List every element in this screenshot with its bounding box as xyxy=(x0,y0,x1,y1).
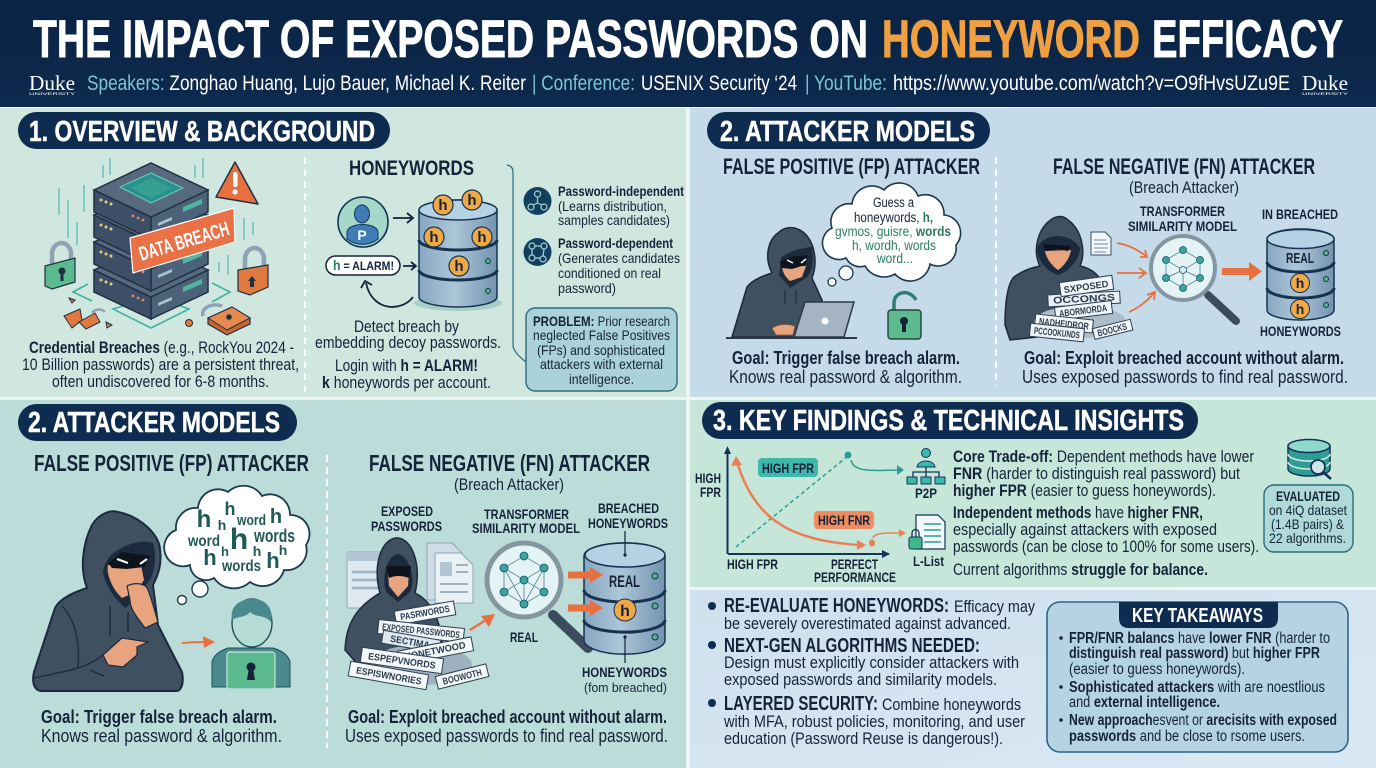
heading pill: attacker models: 2. ATTACKER MODELS xyxy=(28,407,280,439)
diagram: honeywords database: h xyxy=(454,258,464,275)
arrow: alarm to database xyxy=(403,262,416,270)
icon: user with locked account xyxy=(212,599,290,689)
chart: FPR FNR trade-off: FPR xyxy=(700,484,721,500)
heading: FP attacker: FALSE POSITIVE (FP) ATTACKER xyxy=(34,450,309,476)
thought cloud: guesses: Guess a xyxy=(873,195,914,210)
callout: key takeaways: New approachesvent or arecisits with exposed xyxy=(1069,712,1337,729)
database: breached honeywords: REAL xyxy=(609,572,640,591)
recommendation: re-evaluate: RE-EVALUATE HONEYWORDS: xyxy=(724,595,949,617)
recommendation: re-evaluate: be severely overestimated against advanced. xyxy=(724,614,1011,633)
icon: magnifier with network xyxy=(487,543,588,648)
thought cloud: honeywords: h xyxy=(218,517,226,533)
callout: problem: intelligence. xyxy=(569,371,634,387)
database: real and honeywords: h xyxy=(1296,275,1304,291)
panel: attacker models bottom left xyxy=(0,400,686,768)
recommendation: layered security: LAYERED SECURITY: xyxy=(724,693,878,715)
recommendation: next-gen algorithms: NEXT-GEN ALGORITHMS NEEDED: xyxy=(724,635,980,657)
callout: evaluated: EVALUATED xyxy=(1276,488,1340,504)
password papers: ESPEPVNORDS xyxy=(367,651,436,672)
chart: FPR FNR trade-off: HIGH FNR xyxy=(818,512,870,528)
speakers and links line: | Conference: xyxy=(532,71,635,95)
heading pill: attacker models: 2. ATTACKER MODELS xyxy=(720,116,975,148)
password papers: PASRWORDS xyxy=(400,604,451,623)
text: core trade-off xyxy=(953,447,1254,500)
diagram: honeywords database: h xyxy=(477,229,487,246)
banner: data breach: DATA BREACH xyxy=(137,218,232,266)
icon: magnifier with network xyxy=(1151,236,1236,321)
labels: transformer similarity model: SIMILARITY MODEL xyxy=(472,520,580,536)
database: breached honeywords xyxy=(584,531,665,663)
illustration: breach attacker with exposed passwords xyxy=(1005,216,1133,342)
banner: data breach xyxy=(130,208,235,273)
logo: Duke right: Duke xyxy=(1302,71,1348,95)
item: password-dependent xyxy=(524,235,680,296)
item: password-independent: (Learns distribution, xyxy=(558,198,667,214)
thought cloud: honeywords xyxy=(164,486,310,604)
thought cloud: guesses: honeywords, h, xyxy=(854,210,933,225)
icon: green lock xyxy=(45,243,75,289)
heading: honeywords: HONEYWORDS xyxy=(349,157,474,180)
caption: credential breaches: 10 Billion passwords) are a persistent threat, xyxy=(22,356,299,374)
item: password-independent xyxy=(524,183,684,228)
caption: honeywords: k honeywords per account. xyxy=(322,374,491,392)
text: struggle for balance: Current algorithms struggle for balance. xyxy=(953,560,1208,579)
goal text: FN attacker xyxy=(1022,348,1348,387)
arrow: user to database xyxy=(393,213,413,223)
browser window xyxy=(347,552,387,608)
goal text: FP attacker xyxy=(729,348,962,387)
speakers and links line: Speakers: Zonghao Huang, Lujo Bauer, Michael K. Reiter xyxy=(87,71,526,95)
icon: open green lock xyxy=(888,293,921,339)
exposed password papers: SXPOSED xyxy=(1063,279,1109,296)
heading: FN attacker: (Breach Attacker) xyxy=(454,476,564,494)
icon: P2P hierarchy xyxy=(907,448,945,501)
callout: key takeaways: distinguish real password) but higher FPR xyxy=(1069,645,1320,662)
takeaways header tab xyxy=(1119,602,1278,628)
heading: FN attacker: (Breach Attacker) xyxy=(1129,179,1239,197)
icon: orange lock xyxy=(238,248,268,295)
goal text: FP attacker: Goal: Trigger false breach alarm. xyxy=(732,348,960,368)
labels: transformer similarity model: SIMILARITY MODEL xyxy=(1128,218,1237,234)
speakers and links line: https://www.youtube.com/watch?v=O9fHvsUZu9E xyxy=(893,71,1290,95)
document with profile xyxy=(427,543,473,603)
thought cloud: honeywords: words xyxy=(221,558,261,575)
callout: key takeaways: Sophisticated attackers with are noestlious xyxy=(1069,679,1325,696)
icon: database search xyxy=(1288,440,1331,479)
callout: problem: (FPs) and sophisticated xyxy=(537,342,665,358)
arrow: loop back xyxy=(361,281,413,307)
honeyword coins xyxy=(424,190,492,276)
arrow: hacker to user xyxy=(182,636,215,648)
thought cloud: guesses xyxy=(822,183,961,286)
label: honeywords from breached: (fom breached) xyxy=(584,680,667,695)
title: HONEYWORD xyxy=(882,10,1140,69)
labels: transformer similarity model xyxy=(1128,203,1237,234)
caption: honeywords: Detect breach by xyxy=(354,318,460,336)
alarm pill: h = ALARM! xyxy=(333,257,394,273)
recommendation: layered security: education (Password Reuse is dangerous!). xyxy=(724,729,1003,748)
laptop xyxy=(794,302,854,337)
illustration: thinking hacker xyxy=(33,511,183,691)
exposed password papers: OCCONGS xyxy=(1053,292,1115,307)
caption: honeywords xyxy=(315,318,501,392)
diagram: honeywords database: h xyxy=(438,197,448,214)
icon: broken lock pieces xyxy=(64,298,192,329)
labels: transformer similarity model: TRANSFORMER xyxy=(484,506,569,522)
thought cloud: honeywords: word xyxy=(187,533,220,550)
label: real: REAL xyxy=(510,629,538,645)
caption: credential breaches xyxy=(22,339,299,391)
thought cloud: honeywords: h xyxy=(279,542,287,558)
text: independent methods: passwords (can be close to 100% for some users). xyxy=(953,537,1259,556)
goal text: FP attacker xyxy=(41,707,282,746)
thought cloud: honeywords: h xyxy=(197,506,211,533)
database: real and honeywords: REAL xyxy=(1286,250,1314,267)
thought cloud: guesses: word... xyxy=(876,251,913,266)
database: breached honeywords: h xyxy=(620,603,630,620)
takeaways header tab: KEY TAKEAWAYS xyxy=(1132,605,1263,627)
panel: recommendations and takeaways xyxy=(690,590,1376,768)
caption: credential breaches: Credential Breaches (e.g., RockYou 2024 - xyxy=(29,339,294,357)
heading: FN attacker: FALSE NEGATIVE (FN) ATTACKER xyxy=(369,450,650,476)
thought cloud: guesses: h, wordh, words xyxy=(852,238,936,253)
database: real and honeywords xyxy=(1267,229,1334,320)
password papers: EXPOSED PASSWORDS xyxy=(382,622,460,641)
illustration: hacker at laptop xyxy=(726,228,857,338)
label: honeywords from breached: HONEYWORDS xyxy=(582,664,667,680)
panel: overview and background xyxy=(0,108,686,397)
callout: problem: attackers with external xyxy=(540,356,663,372)
text: independent methods: Independent methods have higher FNR, xyxy=(953,503,1203,522)
item: password-dependent: Password-dependent xyxy=(558,235,673,251)
chart: FPR FNR trade-off xyxy=(695,446,906,585)
heading: FN attacker xyxy=(369,450,650,494)
illustration: data breach server xyxy=(45,158,268,335)
labels: exposed passwords: EXPOSED xyxy=(381,503,433,519)
recommendation: next-gen algorithms xyxy=(708,635,1019,689)
speakers and links line: USENIX Security ‘24 xyxy=(641,71,797,95)
password papers: BOOWOTH xyxy=(442,667,483,688)
label: in breached: IN BREACHED xyxy=(1262,206,1338,222)
chart: FPR FNR trade-off: HIGH FPR xyxy=(762,460,814,476)
goal text: FN attacker xyxy=(345,707,668,746)
thought cloud: honeywords: h xyxy=(270,506,282,528)
recommendation: layered security: with MFA, robust policies, monitoring, and user xyxy=(723,712,1025,731)
speakers and links line xyxy=(87,71,1290,95)
goal text: FP attacker: Knows real password & algorithm. xyxy=(729,367,962,387)
icon: broken orange lock xyxy=(203,305,250,335)
arrow: to honeyword xyxy=(568,600,603,616)
password papers xyxy=(348,601,489,690)
thought cloud: honeywords: h xyxy=(203,545,217,570)
callout: problem: neglected False Positives xyxy=(533,327,670,343)
callout: key takeaways xyxy=(1047,602,1348,752)
heading: FP attacker: FALSE POSITIVE (FP) ATTACKER xyxy=(723,154,980,179)
text: core trade-off: higher FPR (easier to guess honeywords). xyxy=(953,481,1216,500)
recommendation: next-gen algorithms: Design must explicitly consider attackers with xyxy=(724,653,1019,672)
thought cloud: honeywords: h xyxy=(266,548,280,573)
password papers: ESPISWNORIES xyxy=(355,665,422,688)
heading pill: key findings: 3. KEY FINDINGS & TECHNICAL INSIGHTS xyxy=(713,405,1184,437)
labels: breached honeywords: BREACHED xyxy=(598,500,659,516)
callout: evaluated: (1.4B pairs) & xyxy=(1271,516,1345,532)
labels: breached honeywords: HONEYWORDS xyxy=(588,515,668,531)
thought cloud: honeywords: h xyxy=(253,543,261,559)
recommendation: next-gen algorithms: exposed passwords and similarity models. xyxy=(724,670,997,689)
labels: transformer similarity model: TRANSFORMER xyxy=(1140,203,1225,219)
text: core trade-off: Core Trade-off: Dependent methods have lower xyxy=(953,447,1254,466)
icon: L-List document: L-List xyxy=(913,553,944,569)
item: password-independent: samples candidates) xyxy=(558,212,670,228)
callout: evaluated xyxy=(1264,485,1353,552)
goal text: FP attacker: Goal: Trigger false breach alarm. xyxy=(41,707,277,727)
chart: FPR FNR trade-off: PERFORMANCE xyxy=(814,569,896,585)
icon: user with password: P xyxy=(357,227,367,243)
item: password-independent: Password-independent xyxy=(558,183,684,199)
item: password-dependent: (Generates candidates xyxy=(558,250,680,266)
arrow: model to database xyxy=(1222,262,1262,281)
database: real and honeywords: h xyxy=(1296,301,1304,317)
callout: problem xyxy=(526,308,677,391)
diagram: honeywords database xyxy=(326,190,502,311)
recommendation: layered security xyxy=(708,693,1025,748)
labels: transformer similarity model xyxy=(472,506,580,536)
thought cloud: honeywords: h xyxy=(221,544,229,559)
callout: key takeaways: and external intelligence. xyxy=(1069,694,1220,711)
arrow: to real xyxy=(568,567,603,583)
icon: document xyxy=(1091,232,1111,255)
caption: honeywords: Login with h = ALARM! xyxy=(335,357,478,375)
speakers and links line: | YouTube: xyxy=(805,71,887,95)
hand on chin xyxy=(127,584,158,628)
chart: FPR FNR trade-off: HIGH xyxy=(695,470,721,486)
callout: key takeaways: (easier to guess honeywords). xyxy=(1069,661,1245,678)
caption: honeywords: embedding decoy passwords. xyxy=(315,334,501,352)
arrow: exposed passwords to model xyxy=(470,614,495,630)
labels: breached honeywords xyxy=(588,500,668,531)
text: core trade-off: FNR (harder to distinguish real password) but xyxy=(953,464,1240,483)
callout: evaluated: 22 algorithms. xyxy=(1269,530,1346,546)
exposed password papers: ABORMORDA xyxy=(1059,303,1108,320)
heading pill: overview: 1. OVERVIEW & BACKGROUND xyxy=(29,116,375,148)
thought cloud: guesses: gvmos, guisre, words xyxy=(835,224,951,239)
thought cloud: honeywords: word xyxy=(236,512,266,529)
text: independent methods xyxy=(953,503,1259,556)
exposed password papers xyxy=(1029,275,1133,342)
recommendation: layered security: Combine honeywords xyxy=(882,695,1021,714)
callout: key takeaways: passwords and be close to rsome users. xyxy=(1069,728,1305,745)
header banner xyxy=(0,0,1376,107)
exposed password papers: BOOCKS xyxy=(1096,321,1128,339)
pointing hand xyxy=(103,638,148,667)
label: honeywords: HONEYWORDS xyxy=(1260,323,1341,339)
thought cloud: honeywords: h xyxy=(224,499,236,519)
illustration: breach attacker with password stack xyxy=(345,538,489,690)
title: THE IMPACT OF EXPOSED PASSWORDS ON xyxy=(33,10,868,69)
icon: user with password xyxy=(338,197,388,247)
recommendation: re-evaluate xyxy=(708,595,1035,633)
goal text: FP attacker: Knows real password & algorithm. xyxy=(41,726,282,746)
database cylinder xyxy=(414,200,502,311)
exposed password papers: NADHEIDROR xyxy=(1038,316,1089,333)
thought cloud: honeywords: h xyxy=(230,523,248,556)
callout: evaluated: on 4iQ dataset xyxy=(1269,502,1347,518)
logo: Duke left: UNIVERSITY xyxy=(29,91,76,96)
panel: attacker models top right xyxy=(690,108,1376,397)
icon: P2P hierarchy: P2P xyxy=(915,485,937,501)
chart: FPR FNR trade-off: HIGH FPR xyxy=(727,556,778,572)
labels: exposed passwords: PASSWORDS xyxy=(371,518,442,534)
logo: Duke right: UNIVERSITY xyxy=(1302,91,1349,96)
label: honeywords from breached xyxy=(582,664,667,695)
password papers: SECTIMA xyxy=(389,634,431,651)
icon: warning triangle xyxy=(216,162,258,204)
logo: Duke left: Duke xyxy=(29,71,75,95)
caption: credential breaches: often undiscovered for 6-8 months. xyxy=(52,373,269,391)
panel: key findings xyxy=(690,400,1376,587)
heading: FN attacker xyxy=(1053,154,1315,197)
goal text: FN attacker: Goal: Exploit breached account without alarm. xyxy=(348,707,667,727)
callout: key takeaways: FPR/FNR balancs have lower FNR (harder to xyxy=(1069,630,1330,647)
chart: FPR FNR trade-off: PERFECT xyxy=(831,556,878,572)
callout: problem: PROBLEM: Prior research xyxy=(533,313,670,329)
labels: exposed passwords xyxy=(371,503,442,534)
thought cloud: honeywords: words xyxy=(253,526,295,546)
text: independent methods: especially against attackers with exposed xyxy=(953,520,1217,539)
icon: L-List document xyxy=(909,515,945,569)
arrows: exposed data to model xyxy=(1117,243,1155,312)
goal text: FN attacker: Uses exposed passwords to find real password. xyxy=(345,726,668,746)
password papers: HONETWOOD xyxy=(404,640,467,663)
diagram: honeywords database: h xyxy=(467,192,477,209)
exposed password papers: PCCOOKUNDS xyxy=(1033,326,1080,341)
item: password-dependent: conditioned on real xyxy=(558,265,661,281)
diagram: honeywords database: h xyxy=(429,229,439,246)
recommendation: re-evaluate: Efficacy may xyxy=(954,597,1035,616)
item: password-dependent: password) xyxy=(558,280,616,296)
